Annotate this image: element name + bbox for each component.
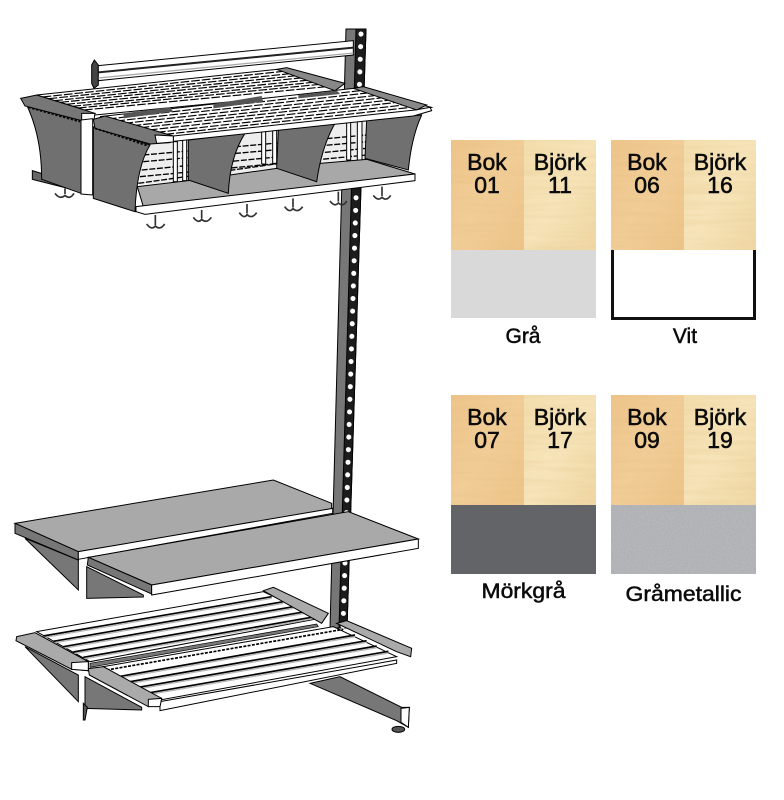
swatch: Bok 07 / Björk 17 / Mörkgrå: Bok [467, 404, 507, 430]
swatch: Bok 06 / Björk 16 / Vit: 16 [707, 172, 733, 198]
swatch: Bok 01 / Björk 11 / Grå: 11 [548, 172, 572, 198]
swatch: Bok 07 / Björk 17 / Mörkgrå: 17 [547, 427, 573, 453]
swatch: Bok 06 / Björk 16 / Vit: Björk [694, 149, 747, 175]
swatch: Bok 07 / Björk 17 / Mörkgrå: Mörkgrå [482, 580, 566, 603]
swatch: Bok 06 / Björk 16 / Vit [611, 140, 756, 348]
upright post [330, 29, 366, 628]
foot [310, 677, 409, 732]
left end caps [21, 95, 173, 212]
swatch: Bok 01 / Björk 11 / Grå [451, 140, 596, 348]
swatch: Bok 07 / Björk 17 / Mörkgrå: 07 [474, 427, 500, 453]
swatch: Bok 09 / Björk 19 / Gråmetallic: Björk [694, 404, 747, 430]
swatch: Bok 07 / Björk 17 / Mörkgrå: Björk [534, 404, 587, 430]
swatch: Bok 09 / Björk 19 / Gråmetallic: Gråmetallic [626, 583, 742, 606]
swatch: Bok 06 / Björk 16 / Vit: Vit [673, 325, 697, 348]
swatch: Bok 01 / Björk 11 / Grå: 01 [474, 172, 500, 198]
shelf unit illustration [15, 29, 432, 732]
wire rod shelf front [103, 627, 397, 711]
top rail [92, 41, 353, 88]
swatch: Bok 01 / Björk 11 / Grå: Grå [505, 325, 541, 348]
wire shelf front [100, 87, 432, 141]
swatch: Bok 07 / Björk 17 / Mörkgrå [451, 395, 596, 603]
swatch: Bok 09 / Björk 19 / Gråmetallic [611, 395, 756, 606]
swatch: Bok 01 / Björk 11 / Grå: Björk [534, 149, 587, 175]
swatch: Bok 06 / Björk 16 / Vit: 06 [634, 172, 660, 198]
dark brackets [27, 105, 422, 193]
rod shelf end caps [16, 587, 412, 707]
back solid shelf [15, 480, 333, 590]
wire rod shelf back [25, 592, 320, 720]
swatch: Bok 01 / Björk 11 / Grå: Bok [467, 149, 507, 175]
swatch: Bok 06 / Björk 16 / Vit: Bok [627, 149, 667, 175]
wire shelf back [37, 68, 345, 115]
swatch: Bok 09 / Björk 19 / Gråmetallic: 09 [634, 427, 660, 453]
hooks [55, 187, 391, 228]
bottom board of top unit [32, 159, 415, 214]
swatch: Bok 09 / Björk 19 / Gråmetallic: 19 [707, 427, 733, 453]
front solid shelf [87, 512, 418, 598]
swatch: Bok 09 / Björk 19 / Gråmetallic: Bok [627, 404, 667, 430]
top hanging unit [21, 41, 432, 228]
back wire grid [138, 120, 370, 185]
lower shelves [15, 480, 418, 732]
